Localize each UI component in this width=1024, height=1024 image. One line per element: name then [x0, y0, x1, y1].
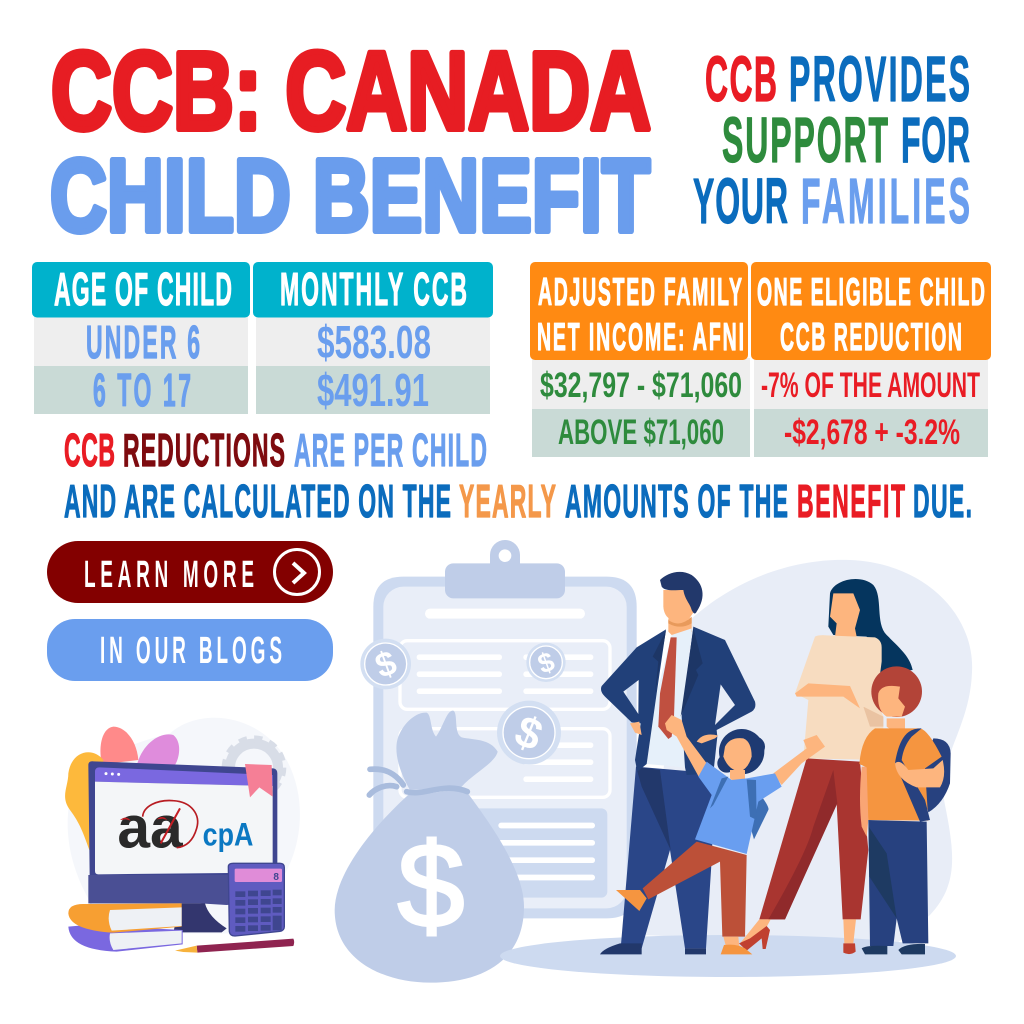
boy — [859, 666, 951, 954]
money bag: $ — [398, 819, 464, 953]
table: AFNI and reduction: NET INCOME: AFNI — [537, 315, 744, 359]
books — [68, 903, 183, 952]
table: AFNI and reduction — [530, 262, 991, 457]
table: age and monthly CCB — [32, 262, 493, 416]
table: age and monthly CCB: UNDER 6 — [86, 316, 200, 368]
title: CHILD BENEFIT — [50, 138, 650, 253]
tagline — [693, 43, 970, 237]
coin center — [497, 701, 561, 765]
button: learn more — [47, 541, 333, 603]
title — [50, 30, 651, 253]
calculator: 8 — [273, 872, 279, 883]
table: AFNI and reduction: CCB REDUCTION — [780, 315, 962, 359]
table: age and monthly CCB: $583.08 — [317, 316, 431, 368]
table: age and monthly CCB: 6 TO 17 — [93, 364, 191, 416]
note: reductions: DUE. — [913, 475, 972, 527]
logo: aaCPA — [117, 794, 253, 861]
button: learn more: LEARN MORE — [84, 554, 254, 596]
tagline: CCB — [705, 43, 777, 115]
girl — [616, 715, 825, 954]
note: reductions: AND ARE CALCULATED ON THE — [64, 475, 451, 527]
button: in our blogs — [47, 619, 333, 681]
note: reductions: AMOUNTS OF THE — [565, 475, 788, 527]
desk background — [65, 718, 300, 933]
coin center: $ — [508, 706, 549, 761]
table: age and monthly CCB: MONTHLY CCB — [280, 263, 467, 315]
calculator — [228, 863, 284, 936]
clipboard — [373, 540, 637, 918]
table: AFNI and reduction: $32,797 - $71,060 — [540, 366, 742, 405]
table: age and monthly CCB: $491.91 — [317, 364, 429, 416]
logo: aaCPA: aa — [117, 794, 184, 861]
ground shadow — [500, 935, 956, 977]
note: reductions: BENEFIT — [797, 475, 905, 527]
tagline: FAMILIES — [801, 165, 970, 237]
note: reductions — [64, 424, 972, 527]
tagline: SUPPORT — [722, 104, 888, 176]
logo: aaCPA: cpA — [203, 816, 253, 853]
illustration: family — [600, 572, 951, 954]
table: AFNI and reduction: ADJUSTED FAMILY — [538, 270, 742, 314]
woman — [739, 579, 913, 954]
background blob — [640, 560, 972, 945]
note: reductions: CCB — [64, 424, 115, 476]
tagline: YOUR — [693, 165, 788, 237]
man — [600, 572, 755, 954]
illustration: clipboard and money bag — [335, 540, 637, 983]
coin left: $ — [370, 644, 402, 686]
note: reductions: REDUCTIONS — [123, 424, 285, 476]
pencil — [175, 939, 294, 953]
money bag — [335, 711, 524, 983]
coin right: $ — [534, 645, 558, 680]
monitor — [88, 761, 277, 932]
title: CCB: CANADA — [51, 30, 651, 153]
note: reductions: ARE PER CHILD — [294, 424, 487, 476]
tagline: FOR — [901, 104, 970, 176]
button: in our blogs: IN OUR BLOGS — [100, 630, 282, 672]
coin right — [526, 643, 566, 682]
table: AFNI and reduction: ONE ELIGIBLE CHILD — [757, 270, 985, 314]
coin left — [360, 639, 411, 689]
table: age and monthly CCB: AGE OF CHILD — [54, 263, 232, 315]
note: reductions: YEARLY — [459, 475, 556, 527]
table: AFNI and reduction: ABOVE $71,060 — [558, 413, 724, 452]
tagline: PROVIDES — [789, 43, 970, 115]
illustration: office desk — [65, 718, 300, 953]
